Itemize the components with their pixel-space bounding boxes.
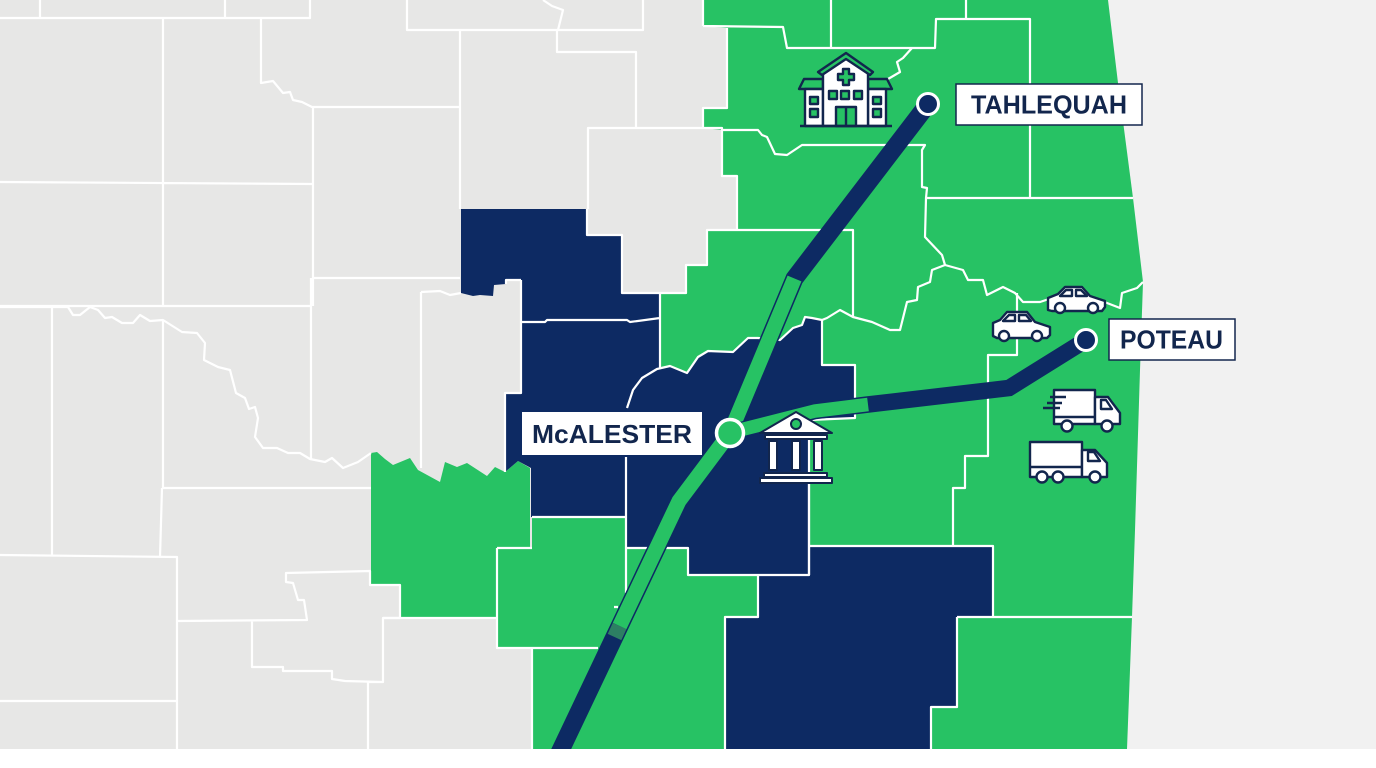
route: McAlester to Poteau (730, 340, 1086, 433)
label: Poteau: POTEAU (1120, 324, 1223, 354)
marker: Poteau (1076, 330, 1096, 350)
map: navy counties (461, 209, 993, 749)
icon: car upper (1048, 287, 1105, 313)
label: Poteau (1109, 319, 1235, 360)
icon: car lower (993, 312, 1050, 341)
icon: box truck (1030, 442, 1107, 482)
right outside area (1108, 0, 1376, 749)
label: Tahlequah: TAHLEQUAH (971, 90, 1127, 120)
label: Tahlequah (956, 84, 1142, 125)
icon: delivery truck (1043, 390, 1120, 432)
label: McAlester (522, 412, 702, 455)
marker: McAlester (716, 420, 744, 446)
marker: Tahlequah (918, 94, 938, 114)
map: green counties (371, 0, 1143, 749)
label: McAlester: McALESTER (532, 419, 692, 449)
route: Tahlequah to McAlester to south highway (556, 104, 928, 760)
icon: courthouse (760, 412, 832, 483)
icon: hospital (799, 53, 892, 126)
